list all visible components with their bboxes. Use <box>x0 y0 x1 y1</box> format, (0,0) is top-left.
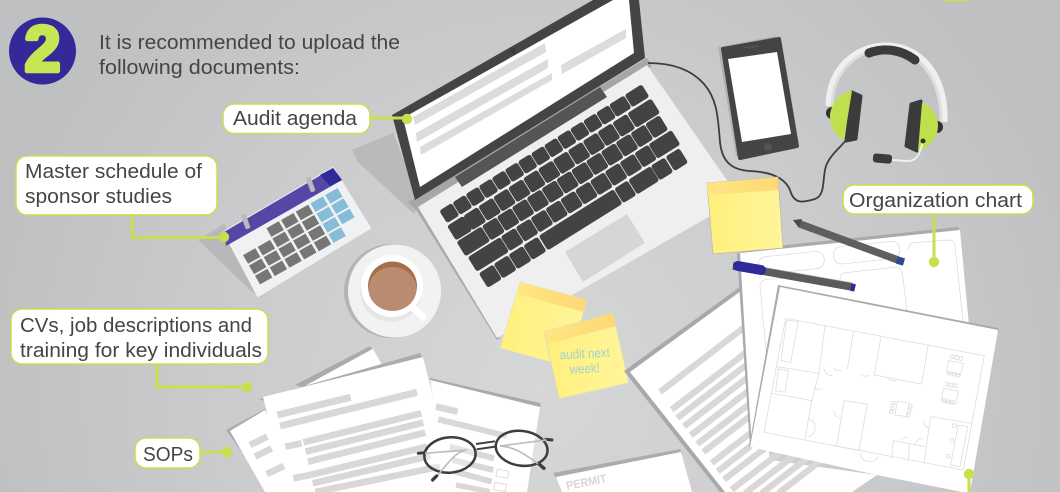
keyboard <box>438 85 690 288</box>
label: audit agenda: Audit agenda <box>233 107 358 130</box>
label: master schedule of sponsor studies <box>16 156 229 242</box>
calendar <box>198 168 370 298</box>
label: master schedule of sponsor studies: Master schedule of <box>25 160 202 183</box>
label: master schedule of sponsor studies: sponsor studies <box>25 185 172 208</box>
smartphone <box>718 36 797 158</box>
step number badge <box>9 13 76 85</box>
label: audit agenda <box>223 104 412 134</box>
step number badge: 2 <box>25 13 60 85</box>
label: CVs, job descriptions and training: training for key individuals <box>20 339 262 362</box>
sticky notes on laptop: audit next <box>559 345 610 362</box>
label: CVs, job descriptions and training: CVs, job descriptions and <box>20 314 252 337</box>
label: organization chart <box>843 185 1033 267</box>
label: CVs, job descriptions and training <box>11 309 268 392</box>
connector end at top edge <box>945 0 967 2</box>
label: SOPs <box>135 438 232 468</box>
floor plan paper <box>749 285 999 492</box>
connector to floor plan <box>964 469 974 492</box>
sticky notes on laptop <box>500 282 629 399</box>
headset <box>826 46 944 164</box>
permit document <box>553 449 692 492</box>
reading glasses <box>418 428 552 480</box>
sticky note near phone <box>707 177 783 254</box>
sticky notes on laptop: week! <box>569 360 600 377</box>
striped report paper <box>624 284 877 492</box>
stack of documents on left <box>226 346 541 492</box>
label: SOPs: SOPs <box>143 443 193 466</box>
laptop <box>352 0 740 340</box>
intro text: following documents: <box>99 56 300 79</box>
pens <box>733 219 904 288</box>
earphone cable <box>648 63 846 202</box>
intro text <box>99 31 400 79</box>
organization chart paper <box>737 227 976 450</box>
intro text: It is recommended to upload the <box>99 31 400 54</box>
coffee cup on saucer <box>344 244 441 338</box>
label: organization chart: Organization chart <box>849 189 1022 212</box>
